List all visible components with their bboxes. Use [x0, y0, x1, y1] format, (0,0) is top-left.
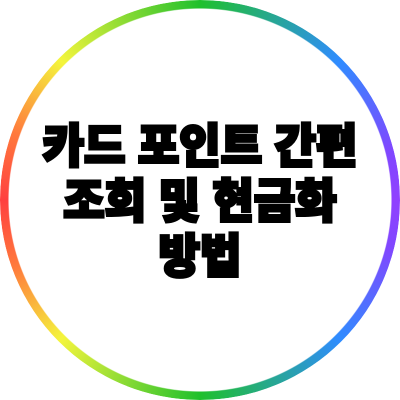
title line 2: 조회 및 현금화 [63, 175, 337, 228]
title line 3: 방법 [159, 230, 241, 283]
title line 1: 카드 포인트 간편 [43, 120, 357, 173]
